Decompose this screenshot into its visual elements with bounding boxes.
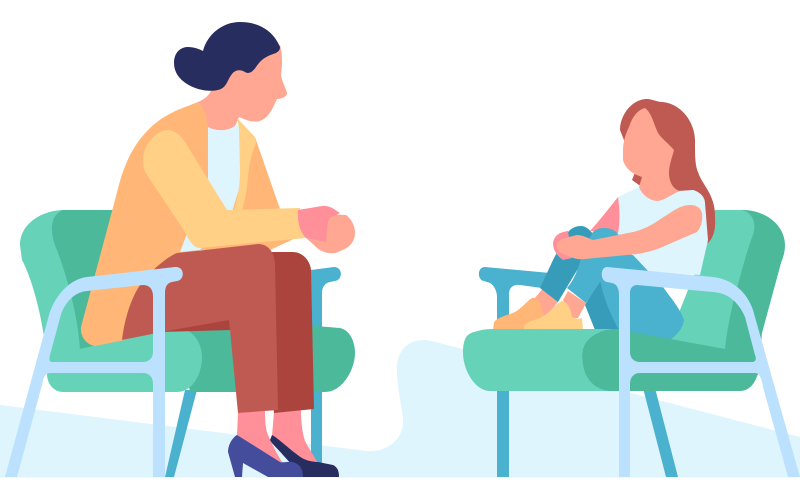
background floor shape bbox=[0, 340, 800, 478]
hand pink bbox=[298, 206, 340, 242]
cushion shade bbox=[582, 329, 625, 391]
woman bbox=[81, 22, 355, 477]
back hand bbox=[553, 231, 572, 260]
knee shadow bbox=[160, 312, 232, 332]
front shoe bbox=[228, 435, 303, 477]
seat dark bbox=[600, 329, 758, 391]
thigh bbox=[590, 255, 684, 340]
hair and bun bbox=[174, 22, 280, 91]
jacket lapel bbox=[233, 118, 256, 211]
seat front cushion bbox=[45, 328, 202, 392]
girl bbox=[493, 99, 715, 340]
right armchair backrest bbox=[668, 210, 785, 375]
rear leg bbox=[643, 388, 678, 477]
backrest outer bbox=[700, 210, 785, 375]
seat bbox=[177, 319, 355, 392]
shirt bbox=[617, 187, 708, 275]
arm and hand bbox=[557, 205, 702, 259]
jacket bbox=[81, 102, 208, 346]
armrest and rear post bbox=[479, 267, 550, 477]
near leg bbox=[567, 228, 632, 303]
front leg lower bbox=[237, 410, 282, 462]
near ankle bbox=[563, 291, 586, 318]
backrest inner shade bbox=[52, 210, 120, 349]
white shirt bbox=[178, 125, 245, 252]
left armchair back parts bbox=[20, 210, 355, 477]
seat light cushion bbox=[463, 329, 613, 391]
jacket sleeve bbox=[143, 130, 306, 248]
inner leg shadow bbox=[585, 280, 620, 330]
rear frame bbox=[165, 267, 341, 477]
right armchair front frame bbox=[602, 267, 800, 477]
neck and face bbox=[198, 45, 287, 132]
front trouser leg bbox=[122, 244, 278, 413]
rear trouser leg bbox=[262, 252, 314, 413]
far shoe bbox=[493, 298, 545, 330]
rear leg lower bbox=[272, 410, 318, 463]
right armchair seat bbox=[463, 329, 758, 391]
backrest bbox=[20, 210, 120, 360]
long hair bbox=[620, 99, 715, 243]
near shoe bbox=[524, 301, 583, 330]
far leg bbox=[540, 226, 593, 302]
rear shoe bbox=[270, 435, 339, 477]
backrest inner bbox=[668, 210, 754, 349]
hand skin bbox=[306, 214, 355, 253]
far ankle bbox=[535, 288, 558, 318]
jacket right side bbox=[200, 137, 300, 250]
right armchair rear frame bbox=[479, 267, 678, 477]
face and neck bbox=[623, 108, 680, 201]
left armchair front frame bbox=[5, 267, 183, 477]
pink arm bbox=[590, 197, 620, 233]
